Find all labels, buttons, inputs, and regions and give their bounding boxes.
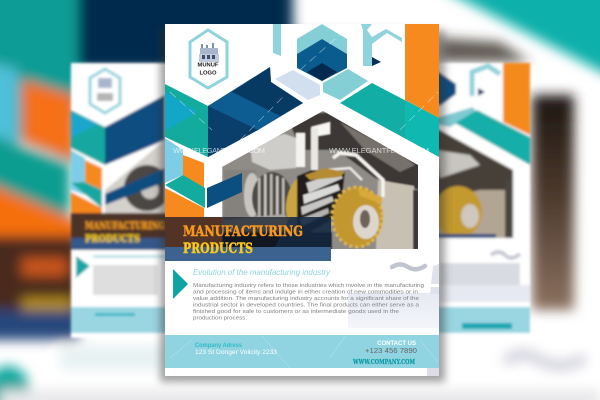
left flyer logo badge: [90, 69, 120, 113]
orange panel: [405, 24, 439, 118]
body text: finished good for sale to customers or as intermediate goods used in the: [193, 309, 400, 315]
title line 1: MANUFACTURING: [183, 224, 303, 240]
company address: 123 St Donger Volicity 2233: [195, 350, 278, 356]
body text: [193, 283, 424, 322]
contact details: CONTACT US: [377, 341, 416, 347]
body text: and processing of items and indulge in either creation of new commodities or in: [193, 290, 418, 296]
contact details: +123 456 7890: [365, 346, 417, 355]
body text: value addition. The manufacturing industry accounts for a significant share of the: [193, 296, 420, 302]
main flyer: [165, 24, 439, 376]
dark machinery upper area: [287, 112, 420, 190]
section heading: Evolution of the manufacturing industry: [193, 268, 331, 277]
logo text: MUNUF: [198, 62, 219, 68]
arrow marker: [173, 269, 188, 299]
photo: gears: [222, 108, 420, 252]
left background flyer: PRODUCTS: [85, 234, 140, 245]
watermark text: WWW.ELEGANTFLYER.COM: [173, 146, 265, 155]
left flyer title: MANUFACTURING: [85, 221, 165, 232]
logo badge: [190, 30, 227, 88]
navy slanted bar: [207, 173, 242, 208]
navy chevron: [208, 67, 303, 157]
beige housing disc: [376, 180, 414, 250]
watermark text: WWW.ELEGANTFLYER.COM: [329, 146, 429, 155]
pipe shape: [361, 24, 402, 66]
top hexagon cluster: [273, 24, 368, 100]
right background flyer: [434, 63, 530, 338]
watermark text: [173, 146, 429, 155]
icon: factory: [199, 43, 219, 62]
diagonal light streaks: [170, 30, 438, 140]
grey shaft gear: [225, 171, 255, 217]
gold gear: [333, 187, 383, 247]
title line 2: PRODUCTS: [183, 241, 253, 257]
left teal blocks: [165, 84, 208, 217]
pale building watermark: [348, 264, 439, 328]
body text: Manufacturing industry refers to those industries which involve in the manufacturing: [193, 283, 424, 289]
company address: Company Adress: [195, 342, 243, 349]
gold ring and helical teeth: [284, 178, 298, 219]
main flyer shadow: [160, 30, 445, 382]
body text: industrial sector in developed countries. The final products can either serve as a: [193, 302, 420, 308]
left background flyer: [71, 63, 170, 338]
contact details: WWW.COMPANY.COM: [352, 359, 415, 366]
footer band: [165, 335, 439, 376]
blurred white parts: [250, 134, 296, 170]
tilde decoration: [392, 264, 425, 269]
body text: production process.: [193, 316, 247, 322]
teal diagonal band: [340, 83, 439, 157]
logo badge: LOGO: [199, 70, 217, 76]
flyer page: [165, 24, 439, 376]
white bracket: [333, 153, 383, 197]
company address: [195, 342, 278, 356]
contact details: [352, 341, 417, 366]
title banner: [165, 217, 331, 261]
